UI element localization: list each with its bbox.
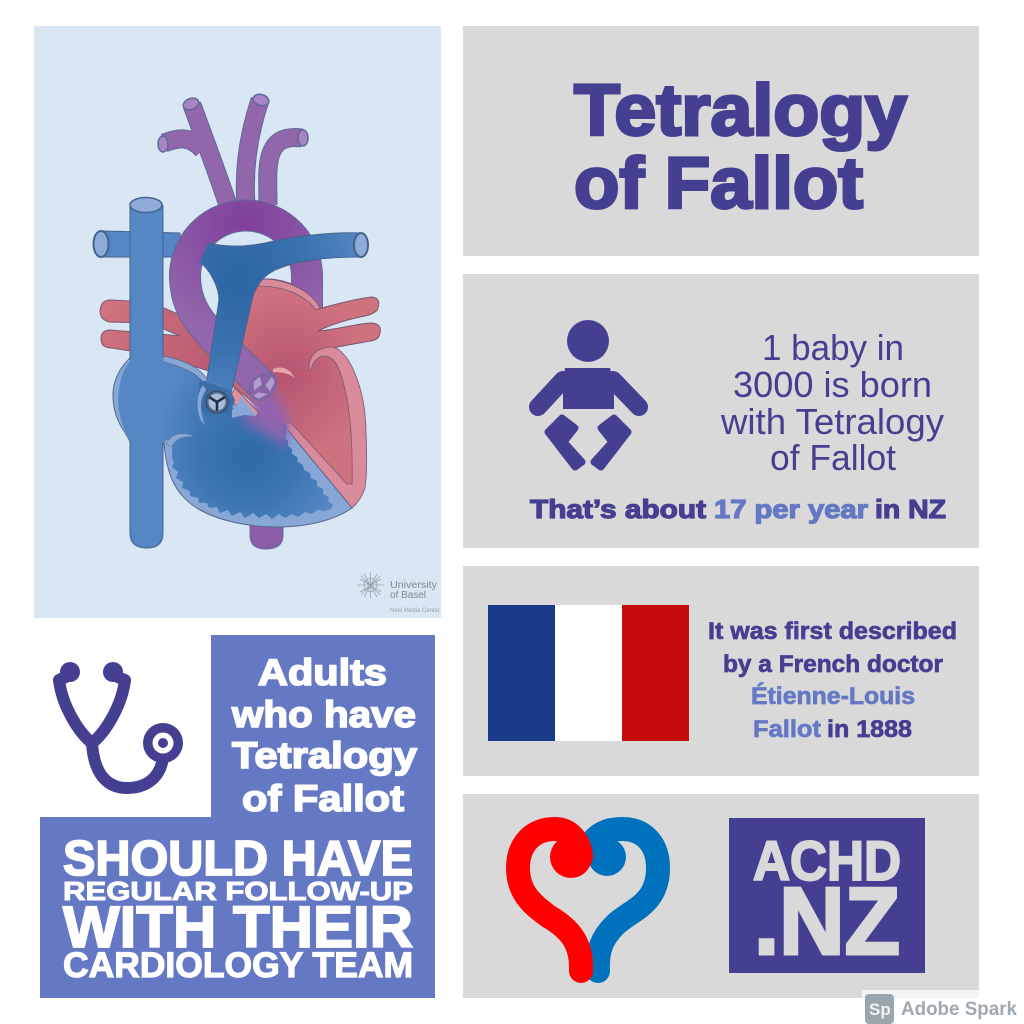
text: adults who have: Tetralogy <box>232 735 417 776</box>
purple arc leaflet <box>273 367 295 378</box>
panel: prevalence <box>463 274 979 548</box>
heart body: left side, red <box>225 279 380 508</box>
aortic arch <box>185 215 307 315</box>
descending aorta stub <box>250 520 283 549</box>
illustration: heart anatomy <box>94 93 380 549</box>
statistic text: 3000 is born <box>733 364 932 405</box>
septal defect mixing <box>240 390 289 447</box>
logo: heart <box>518 829 658 971</box>
logo: University of Basel: University <box>390 580 437 591</box>
text: follow-up message <box>63 832 413 985</box>
logo: ACHD.NZ <box>729 818 925 975</box>
history text: in 1888 <box>827 716 912 743</box>
history text: by a French doctor <box>723 651 943 678</box>
history text: Fallot <box>753 716 821 743</box>
watermark: Adobe Spark <box>862 990 1024 1024</box>
NZ statistic: 17 per year <box>714 494 868 524</box>
pulmonary veins left <box>100 300 222 375</box>
NZ statistic: in NZ <box>875 494 946 524</box>
history text <box>708 618 957 743</box>
pink crest <box>258 279 320 310</box>
icon: baby <box>538 320 639 467</box>
panel: adults follow-up <box>40 635 435 998</box>
NZ statistic: That’s about <box>530 494 706 524</box>
text: follow-up message: WITH THEIR <box>63 895 413 960</box>
statistic text: with Tetralogy <box>720 401 944 442</box>
pulmonary artery and trunk <box>200 233 368 398</box>
logo: University of Basel <box>357 572 440 614</box>
panel: logos <box>463 794 979 998</box>
NZ statistic <box>530 494 946 524</box>
logo: University of Basel: New Media Center <box>390 608 440 614</box>
right ventricle cavity with trabeculae <box>172 405 333 519</box>
aortic arch branches <box>158 93 308 205</box>
panel: history <box>463 566 979 776</box>
text: adults who have: who have <box>231 694 416 735</box>
history text: Étienne-Louis <box>751 682 915 710</box>
text: follow-up message: CARDIOLOGY TEAM <box>63 946 413 985</box>
right atrium bulge <box>113 356 236 442</box>
aortic valve <box>244 369 282 405</box>
history text: It was first described <box>708 618 957 645</box>
tricuspid leaflet <box>166 433 192 447</box>
watermark: Adobe Spark: Sp <box>869 1000 891 1019</box>
left pulmonary artery stub <box>94 231 180 257</box>
statistic text: of Fallot <box>770 437 896 478</box>
watermark: Adobe Spark: Adobe Spark <box>901 999 1017 1020</box>
logo: ACHD.NZ: .NZ <box>754 868 900 975</box>
text: adults who have: of Fallot <box>242 778 404 819</box>
text: adults who have <box>231 652 417 819</box>
icon: French flag <box>488 605 689 741</box>
heading line 2: of Fallot <box>574 144 863 224</box>
aortic root limb <box>185 272 265 388</box>
panel: title <box>463 26 979 256</box>
panel: heart illustration <box>34 26 441 618</box>
text: follow-up message: SHOULD HAVE <box>63 832 413 886</box>
systemic vein <box>130 198 163 548</box>
right ventricle outer wall <box>163 400 352 527</box>
pulmonary valve <box>198 380 257 425</box>
left ventricle wall <box>286 347 367 508</box>
text: follow-up message: REGULAR FOLLOW-UP <box>63 876 413 906</box>
logo: ACHD.NZ: ACHD <box>753 829 901 892</box>
text: adults who have: Adults <box>258 652 387 693</box>
statistic text: 1 baby in <box>762 327 904 368</box>
icon: stethoscope <box>59 662 183 788</box>
statistic text <box>720 327 944 478</box>
logo: University of Basel: of Basel <box>390 590 426 601</box>
septum ridge <box>228 388 258 417</box>
heading line 1: Tetralogy <box>574 71 907 151</box>
